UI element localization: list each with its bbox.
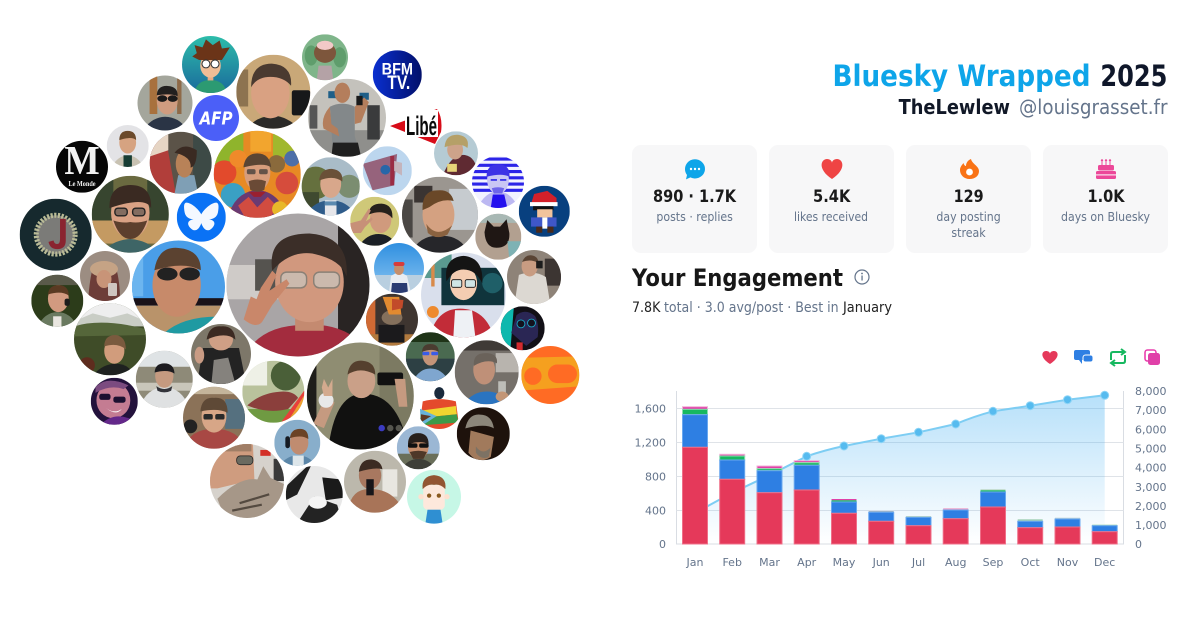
stat label: likes received (794, 210, 868, 224)
engagement summary: total · 3.0 avg/post · Best in (664, 300, 839, 316)
avatar: Le Monde logo: Le Monde (68, 180, 96, 188)
avatar: mirror selfie in black sweatshirt (307, 342, 414, 450)
avatar: grey-haired man in dark (457, 407, 510, 460)
avatar: person wearing pride flag (416, 383, 462, 429)
right axis labels: 5,000 (1135, 442, 1166, 456)
stat label: streak (951, 226, 986, 240)
avatar: Le Monde logo: M (64, 137, 100, 183)
avatar: person in bucket hat (80, 251, 130, 301)
month labels: Dec (1094, 556, 1115, 569)
month labels: Jul (911, 556, 925, 569)
avatar: man in white hoodie (136, 351, 193, 408)
right axis labels: 1,000 (1135, 519, 1166, 532)
avatar: dark cat (475, 214, 521, 260)
panel: posts and replies (632, 145, 757, 253)
avatar: man with blue sunglasses by lake (406, 332, 455, 381)
icon: birthday cake (1096, 159, 1116, 179)
icon: quotes squares (1145, 350, 1160, 365)
left axis labels (634, 402, 666, 551)
avatar: shirtless mirror selfie (344, 451, 406, 513)
avatar: Libération logo (390, 109, 442, 144)
avatar: blue striped portrait (472, 156, 524, 208)
avatar: orange logo (521, 346, 579, 404)
user handle (899, 95, 1168, 119)
month labels: Jun (872, 556, 890, 569)
stat value: 890 · 1.7K (653, 187, 737, 207)
month labels: Apr (797, 556, 817, 569)
avatar: smiling man outdoors on green (31, 275, 83, 327)
right axis labels: 4,000 (1135, 462, 1166, 475)
avatar: black and white photo (286, 466, 343, 523)
avatar: anime boy with code screen (421, 252, 506, 338)
panel: likes received (769, 145, 894, 253)
left axis labels: 0 (659, 538, 666, 551)
avatar: BFM TV logo: TV. (387, 72, 410, 94)
icon: replies bubbles (1074, 350, 1093, 364)
stat value: 1.0K (1088, 187, 1125, 207)
stat value: 129 (954, 187, 984, 207)
avatar: person lying in garden with rainbow corner (242, 361, 304, 423)
avatar: man among colourful puppets (212, 131, 301, 218)
stat label (936, 210, 1001, 240)
stacked bars (682, 407, 1117, 544)
title: 2025 (1100, 59, 1167, 93)
right axis labels: 2,000 (1135, 500, 1166, 513)
avatar: BFM TV logo (373, 50, 422, 99)
avatar: man with sunglasses by window (138, 76, 192, 130)
cumulative points (803, 391, 1109, 460)
avatar: AFP logo (193, 95, 239, 141)
right axis labels: 8,000 (1135, 385, 1166, 398)
avatar: man with bow tie (299, 157, 361, 215)
stat label: day posting (936, 210, 1001, 224)
month labels: Jan (686, 556, 704, 569)
avatar: animated woman (150, 132, 212, 194)
avatar: cartoon boy with glasses (182, 36, 239, 93)
avatar: man in mountains (74, 303, 146, 375)
right axis labels: 6,000 (1135, 423, 1166, 436)
icon: flame (960, 159, 979, 179)
avatar: bearded man in sunglasses (397, 426, 440, 469)
user handle: TheLewlew (899, 95, 1010, 119)
chart legend (1042, 349, 1160, 366)
panel: days on Bluesky (1043, 145, 1168, 253)
icon: chat bubble (685, 159, 705, 179)
avatar: man in elevator mirror (455, 340, 519, 404)
avatar: man with cat (210, 444, 284, 518)
month labels: Mar (759, 556, 780, 569)
cumulative area (695, 395, 1105, 544)
avatar: Libération logo: Libé (406, 111, 437, 141)
month labels: May (833, 556, 856, 569)
month labels: Nov (1057, 556, 1079, 569)
avatar: dark-haired person from above (191, 324, 251, 384)
chart: monthly engagement with cumulative line (634, 385, 1166, 569)
avatar: Le Monde logo (56, 137, 108, 193)
month labels: Aug (945, 556, 966, 569)
avatar: purple duotone man (91, 378, 138, 425)
avatar: climber on red tower (363, 146, 412, 195)
stat label: posts · replies (656, 210, 733, 224)
avatar: Darth Vader with glasses (501, 306, 545, 350)
avatar: mint cartoon boy (407, 470, 461, 524)
title: Bluesky Wrapped (832, 59, 1090, 93)
engagement summary: January (842, 300, 892, 316)
left axis labels: 1,200 (634, 436, 666, 450)
avatar: bald creature on green leaves (302, 34, 348, 80)
avatar: man in warm room (236, 55, 310, 129)
avatar: Bluesky butterfly logo (177, 193, 226, 242)
avatar: mirror selfie in white t-shirt (507, 250, 561, 304)
right axis labels: 3,000 (1135, 481, 1166, 494)
stat label: days on Bluesky (1061, 210, 1150, 224)
left axis labels: 400 (645, 504, 666, 518)
avatar: man with headphones (274, 420, 320, 466)
avatar: man in front of blue sky (132, 240, 225, 334)
avatar: man with raised peace sign (350, 197, 399, 246)
avatar: blond person with drink (434, 131, 478, 175)
icon: likes heart (1042, 351, 1058, 364)
avatar: J wreath logo (20, 199, 92, 271)
cumulative line (695, 395, 1105, 513)
avatar cluster (20, 34, 579, 524)
icon: repost arrows (1111, 349, 1125, 366)
avatar: man at the gym (308, 79, 386, 157)
avatar: pixel art santa (519, 186, 570, 237)
month labels (686, 556, 1115, 569)
month labels: Sep (983, 556, 1003, 569)
engagement summary: 7.8K (632, 300, 661, 316)
left axis labels: 1,600 (634, 402, 666, 416)
icon: heart (822, 159, 842, 179)
avatar: man with red shirt in library (183, 387, 245, 449)
month labels: Feb (722, 556, 742, 569)
avatar: smiling man in light jacket (107, 125, 149, 167)
stat value: 5.4K (813, 187, 851, 207)
avatar: man in hat on sunny day (374, 243, 424, 293)
avatar: BFM TV logo: BFM (382, 61, 413, 79)
month labels: Oct (1021, 556, 1040, 569)
avatar: smiling man in office (402, 177, 478, 253)
icon: info (855, 270, 869, 284)
panel: day posting streak (906, 145, 1031, 253)
right axis labels: 0 (1135, 538, 1142, 551)
heading: your engagement: Your Engagement (631, 264, 843, 292)
right axis labels (1135, 385, 1166, 551)
right axis labels: 7,000 (1135, 404, 1166, 417)
avatar: main man with peace sign (226, 214, 370, 356)
user handle: @louisgrasset.fr (1019, 95, 1168, 119)
left axis labels: 800 (645, 470, 666, 484)
avatar: bearded man with glasses (92, 176, 169, 253)
avatar: cat with book (366, 294, 418, 346)
avatar: AFP logo: AFP (198, 109, 233, 129)
